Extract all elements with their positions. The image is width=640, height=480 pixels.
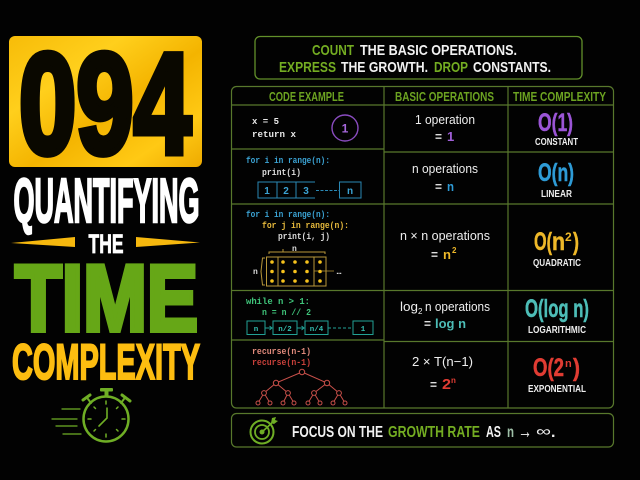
operations: quadratic: n: [443, 247, 451, 262]
code: exponential: recurse(n-1): [252, 358, 311, 368]
focus statement: ∞: [536, 423, 551, 439]
code: constant: return x: [252, 129, 296, 140]
icon: one operation circle: [332, 115, 358, 141]
diagram: sequence boxes: 1: [264, 186, 270, 197]
diagram: n by n dot grid: [253, 245, 343, 286]
focus statement: AS: [486, 424, 501, 441]
focus statement: FOCUS ON THE: [292, 424, 383, 441]
diagram: halving chain: n/2: [278, 326, 292, 334]
diagram: n by n dot grid: n: [253, 268, 258, 277]
panel: title column: [9, 25, 202, 442]
complexity: constant: CONSTANT: [535, 137, 578, 148]
focus statement: n: [507, 424, 514, 441]
complexity: logarithmic: O(log n): [525, 295, 589, 323]
operations: logarithmic: =: [424, 316, 431, 331]
complexity: exponential: EXPONENTIAL: [528, 384, 586, 395]
code: quadratic: print(i, j): [278, 232, 330, 242]
diagram: halving chain: 1: [361, 326, 366, 334]
complexity: constant: [535, 109, 578, 148]
heading: complexity: COMPLEXITY: [12, 334, 200, 390]
operations: logarithmic: log: [400, 299, 418, 314]
operations: linear: n: [447, 179, 454, 194]
complexity: quadratic: n: [552, 228, 565, 256]
operations: logarithmic: [400, 299, 490, 331]
column headers: TIME COMPLEXITY: [513, 90, 607, 104]
complexity: constant: O(1): [538, 109, 573, 137]
complexity: linear: LINEAR: [541, 189, 573, 200]
operations: quadratic: [400, 228, 490, 262]
focus statement: [292, 421, 555, 443]
operations: exponential: 2: [442, 376, 451, 393]
callout: count, express, drop: EXPRESS: [279, 59, 336, 76]
heading: the, with side arrows: [11, 229, 200, 259]
complexity: quadratic: ): [573, 228, 579, 256]
diagram: halving chain: n: [254, 326, 259, 334]
code: logarithmic: n = n // 2: [262, 308, 311, 318]
operations: constant: =: [435, 129, 442, 144]
callout: count, express, drop: DROP: [434, 59, 468, 76]
diagram: halving chain: [247, 321, 373, 334]
operations: constant: 1 operation: [415, 112, 475, 127]
panel: complexity table: [232, 86, 614, 408]
column headers: [269, 90, 607, 104]
complexity: quadratic: QUADRATIC: [533, 258, 581, 269]
complexity: logarithmic: LOGARITHMIC: [528, 325, 586, 336]
complexity: quadratic: [533, 228, 581, 269]
operations: exponential: 2 × T(n−1): [412, 354, 473, 369]
column headers: BASIC OPERATIONS: [395, 90, 494, 104]
operations: quadratic: n × n operations: [400, 228, 490, 243]
focus statement: →: [518, 421, 532, 443]
row: exponential: [252, 347, 586, 405]
complexity: exponential: [528, 354, 586, 395]
code: quadratic: [246, 210, 349, 242]
code: constant: [252, 116, 296, 140]
focus statement: .: [551, 424, 555, 441]
callout: count, express, drop: [255, 36, 582, 79]
code: linear: print(i): [262, 168, 301, 178]
code: logarithmic: while n > 1:: [246, 297, 310, 307]
code: logarithmic: [246, 297, 311, 318]
complexity: logarithmic: [525, 295, 589, 336]
callout: count, express, drop: THE GROWTH.: [341, 59, 428, 76]
diagram: sequence boxes: 2: [283, 186, 289, 197]
operations: linear: n operations: [412, 161, 478, 176]
row: linear: [246, 156, 574, 200]
operations: exponential: =: [430, 377, 437, 392]
operations: exponential: n: [451, 376, 456, 385]
complexity: linear: O(n): [538, 159, 574, 187]
heading: the, with side arrows: THE: [88, 229, 124, 259]
complexity: exponential: n: [565, 358, 572, 370]
complexity: quadratic: O(: [534, 228, 552, 256]
callout: count, express, drop: CONSTANTS.: [473, 59, 551, 76]
diagram: halving chain: n/4: [310, 326, 324, 334]
code: quadratic: for i in range(n):: [246, 210, 330, 220]
complexity: exponential: ): [573, 354, 580, 382]
infographic canvas: QUANTIFYING: [14, 167, 200, 236]
code: exponential: recurse(n-1): [252, 347, 311, 357]
complexity: exponential: O(2: [533, 354, 564, 382]
operations: linear: [412, 161, 478, 194]
complexity: linear: [538, 159, 574, 200]
code: linear: [246, 156, 330, 178]
diagram: sequence boxes: [258, 182, 361, 198]
operations: quadratic: =: [431, 247, 438, 262]
code: quadratic: for j in range(n):: [262, 221, 349, 231]
diagram: n by n dot grid: ...: [335, 268, 343, 277]
callout: count, express, drop: THE BASIC OPERATIONS.: [360, 42, 517, 59]
focus statement: GROWTH RATE: [388, 424, 480, 441]
operations: logarithmic: log n: [435, 316, 466, 331]
diagram: sequence boxes: 3: [303, 186, 309, 197]
column headers: CODE EXAMPLE: [269, 90, 344, 104]
icon: stopwatch: [52, 388, 130, 442]
operations: logarithmic: n operations: [425, 299, 490, 314]
code: linear: for i in range(n):: [246, 156, 330, 166]
code: constant: x = 5: [252, 116, 279, 127]
code: exponential: [252, 347, 311, 368]
callout: count, express, drop: COUNT: [312, 42, 354, 59]
row: quadratic: [246, 210, 581, 286]
operations: constant: 1: [447, 129, 454, 144]
operations: linear: =: [435, 179, 442, 194]
heading: time: TIME: [15, 246, 198, 350]
row: logarithmic: [246, 295, 589, 336]
operations: constant: [415, 112, 475, 144]
operations: quadratic: 2: [452, 246, 457, 255]
complexity: quadratic: 2: [565, 230, 572, 244]
diagram: recursion tree: [256, 369, 347, 405]
table grid: [232, 86, 614, 408]
row: constant: [252, 109, 578, 148]
diagram: sequence boxes: n: [347, 186, 353, 197]
operations: logarithmic: 2: [418, 307, 423, 316]
icon: target with arrow: [250, 417, 278, 444]
number badge 094: 094: [19, 25, 191, 184]
icon: one operation circle: 1: [342, 122, 349, 136]
diagram: n by n dot grid: n: [292, 245, 297, 254]
callout: focus on growth rate: [232, 414, 614, 447]
operations: exponential: [412, 354, 473, 393]
